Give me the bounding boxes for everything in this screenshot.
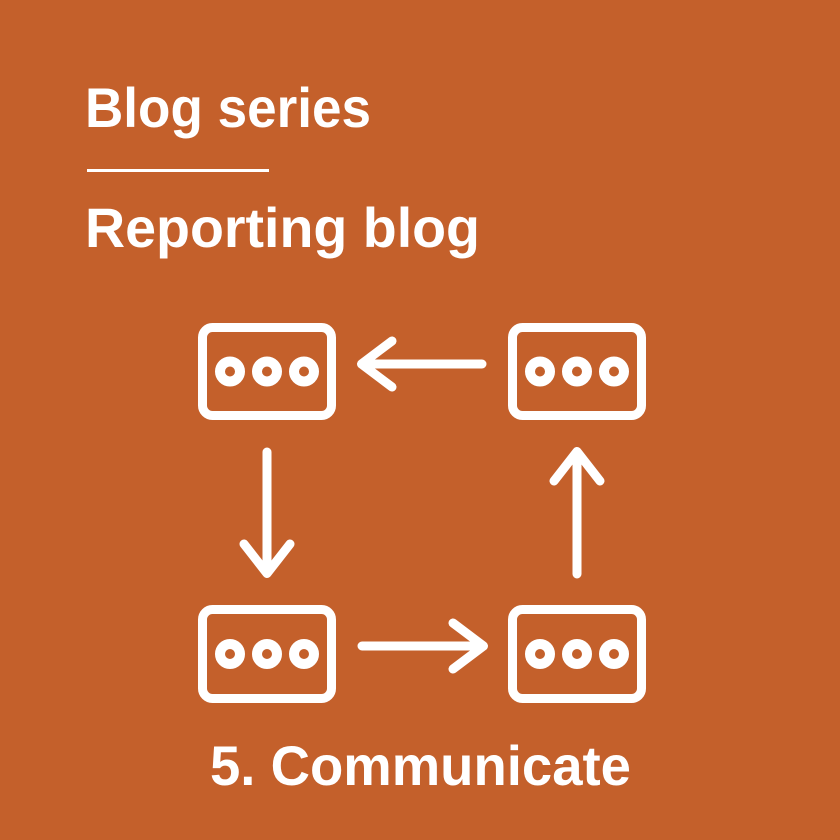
- arrow: pointing down, left column: [244, 452, 290, 574]
- arrow: pointing up, right column: [554, 452, 600, 574]
- arrow: pointing right, bottom row: [362, 623, 484, 669]
- icon: bottom-right message box: [512, 610, 642, 698]
- icon: top-right message box: [512, 328, 642, 416]
- divider line under heading: [87, 169, 269, 172]
- heading: blog series: Blog series: [85, 76, 371, 139]
- icon: bottom-left message box: [202, 610, 332, 698]
- icon: top-left message box: [202, 328, 332, 416]
- caption: step name: 5. Communicate: [210, 734, 631, 797]
- process cycle diagram: [202, 328, 642, 698]
- arrow: pointing left, top row: [362, 341, 482, 387]
- subheading: reporting blog: Reporting blog: [85, 196, 480, 259]
